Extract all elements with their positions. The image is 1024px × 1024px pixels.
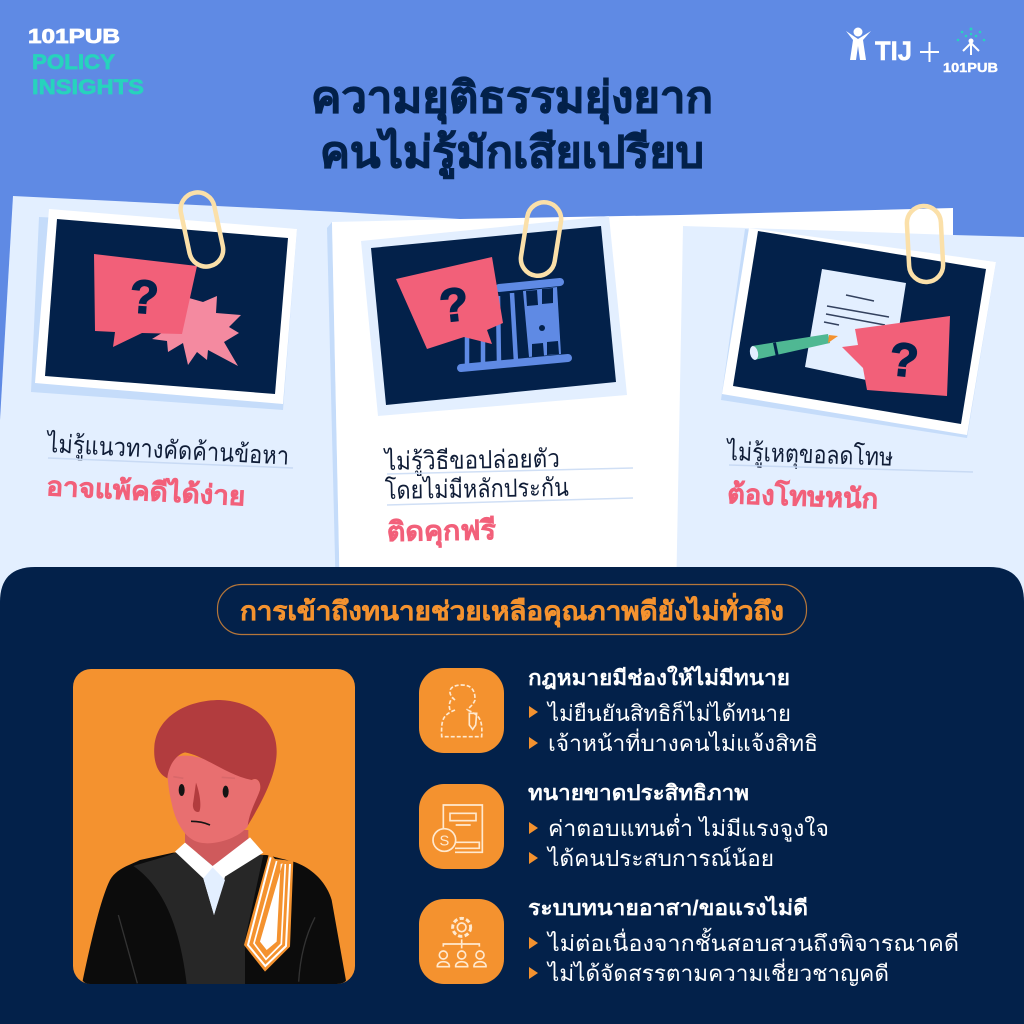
question mark: ? <box>437 277 471 332</box>
photo 2: jail cell <box>361 216 627 416</box>
logo: TIJ + 101PUB: TIJ <box>875 36 912 66</box>
icon tile: gear and team <box>419 899 504 984</box>
panel: legal aid access <box>0 567 1024 1024</box>
logo: 101PUB Policy Insights: INSIGHTS <box>32 76 144 99</box>
text block: lawyer inefficiency <box>528 782 829 871</box>
card 1 text <box>45 429 293 511</box>
heading pill: การเข้าถึงทนายช่วยเหลือคุณภาพดียังไม่ทั่วถึง <box>240 592 784 628</box>
card 2 edge shadow <box>327 222 340 600</box>
logo: TIJ + 101PUB <box>846 28 998 75</box>
paperclip 3 <box>906 205 944 283</box>
card 1 text: ไม่รู้แนวทางคัดค้านข้อหา <box>45 429 290 472</box>
card 2 text <box>383 444 633 549</box>
text block: no lawyer: เจ้าหน้าที่บางคนไม่แจ้งสิทธิ <box>548 728 818 756</box>
text block: no lawyer: ไม่ยืนยันสิทธิก็ไม่ได้ทนาย <box>546 699 791 726</box>
title: ความยุติธรรมยุ่งยาก <box>311 74 713 125</box>
card 3 text: ไม่รู้เหตุขอลดโทษ <box>725 437 894 473</box>
stole <box>244 853 293 972</box>
text block: no lawyer <box>528 665 818 756</box>
paperclip 2 <box>518 200 564 278</box>
hair <box>154 700 277 826</box>
text block: lawyer inefficiency: ได้คนประสบการณ์น้อย <box>546 846 774 871</box>
icon: speech bubble <box>396 257 503 349</box>
icon: document <box>805 269 906 385</box>
illustration: lawyer <box>73 669 355 984</box>
text block: volunteer lawyer system <box>528 895 959 986</box>
icon: burst <box>152 296 241 366</box>
card 3 text <box>725 437 973 514</box>
icon: pen <box>749 334 838 361</box>
card 2 text: ไม่รู้วิธีขอปล่อยตัว <box>383 444 560 477</box>
logo: 101PUB Policy Insights <box>28 26 144 99</box>
robe <box>83 853 346 984</box>
icon: cage bars <box>467 293 516 366</box>
text block: volunteer lawyer system: ระบบทนายอาสา/ขอแรงไม่ดี <box>528 895 808 920</box>
paperclip 1 <box>177 189 226 270</box>
icon: cage door <box>523 287 561 357</box>
icon: speech bubble <box>842 316 950 396</box>
title <box>311 74 713 179</box>
card 3 text: ต้องโทษหนัก <box>727 477 879 514</box>
eyes, nose, mouth <box>179 784 185 796</box>
text block: volunteer lawyer system: ไม่ได้จัดสรรตามความเชี่ยวชาญคดี <box>546 958 889 986</box>
white back sheet <box>332 208 953 600</box>
photo 3: document and pen <box>721 228 996 438</box>
collar <box>175 837 263 915</box>
logo: 101PUB Policy Insights: POLICY <box>32 51 115 74</box>
card 2 text: โดยไม่มีหลักประกัน <box>385 473 569 505</box>
heading pill <box>218 584 806 634</box>
neck <box>185 830 248 867</box>
logo: 101PUB Policy Insights: 101PUB <box>28 26 120 48</box>
icon: speech bubble <box>94 254 197 347</box>
card 1 text: อาจแพ้คดีได้ง่าย <box>46 470 246 511</box>
title: คนไม่รู้มักเสียเปรียบ <box>320 127 704 179</box>
icon tile: no lawyer <box>419 668 504 753</box>
logo: TIJ + 101PUB: 101PUB <box>943 60 998 75</box>
face <box>167 756 260 843</box>
text block: lawyer inefficiency: ค่าตอบแทนต่ำ ไม่มีแรงจูงใจ <box>548 813 829 842</box>
photo 1: dispute with no defence <box>31 209 297 410</box>
card 2 text: ติดคุกฟรี <box>387 515 497 549</box>
icon tile: book and money <box>419 784 504 869</box>
panel: first card background <box>0 196 460 600</box>
panel: third card background <box>676 226 1024 600</box>
question mark: ? <box>128 269 160 324</box>
question mark: ? <box>887 332 921 387</box>
text block: volunteer lawyer system: ไม่ต่อเนื่องจากชั้นสอบสวนถึงพิจารณาคดี <box>546 928 959 956</box>
text block: no lawyer: กฎหมายมีช่องให้ไม่มีทนาย <box>528 665 790 690</box>
text block: lawyer inefficiency: ทนายขาดประสิทธิภาพ <box>528 782 749 805</box>
icon tile: book and money: S <box>439 833 449 849</box>
